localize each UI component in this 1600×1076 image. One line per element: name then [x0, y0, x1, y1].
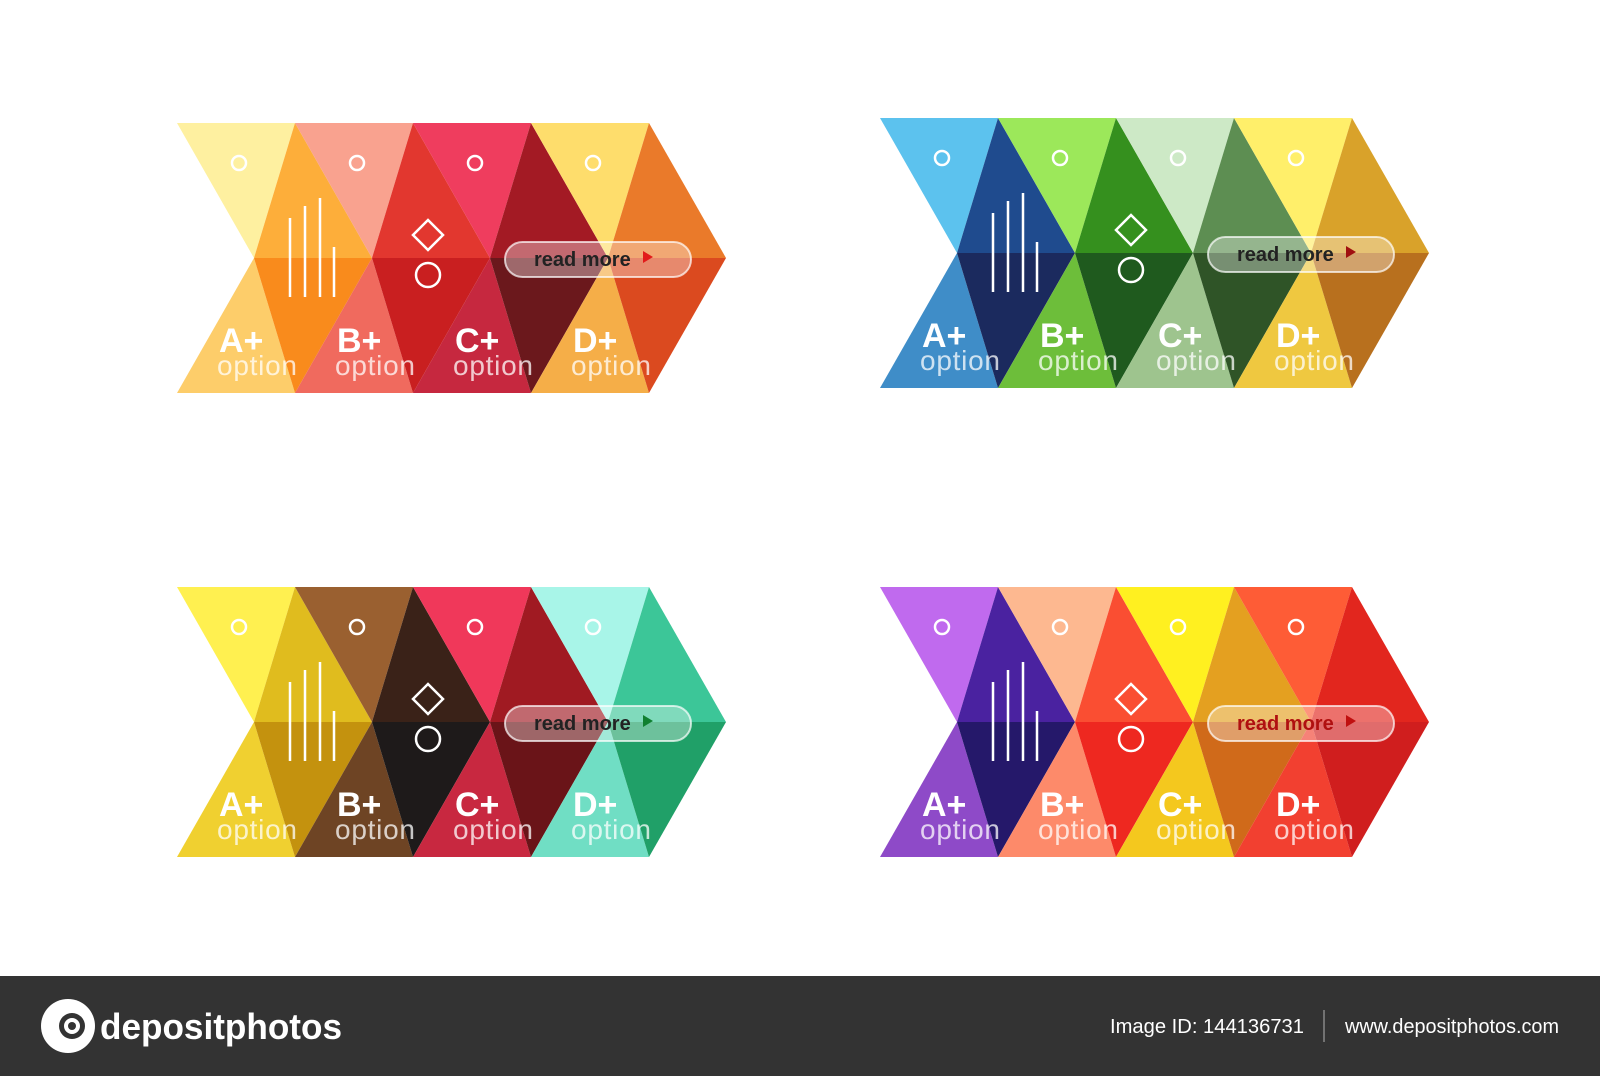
column C: [1116, 118, 1311, 388]
option labels: option: [453, 814, 533, 845]
panel: purple orange red chevron: [880, 587, 1429, 857]
logo text: depositphotos: [100, 1006, 342, 1047]
option labels: D+: [1276, 786, 1320, 824]
panel: blue green chevron: [880, 118, 1429, 388]
column C: [413, 123, 608, 393]
read more button: [505, 242, 691, 277]
column B: [295, 123, 490, 393]
read more button: [505, 706, 691, 741]
option labels: C+: [1158, 786, 1202, 824]
option labels: D+: [573, 322, 617, 360]
option labels: C+: [1158, 317, 1202, 355]
option labels: [920, 317, 1354, 376]
option labels: option: [1038, 345, 1118, 376]
read more button: read more: [534, 249, 631, 271]
column C: [413, 587, 608, 857]
option labels: option: [217, 350, 297, 381]
option labels: option: [920, 814, 1000, 845]
column A: [880, 118, 1075, 388]
option labels: B+: [1040, 317, 1084, 355]
column D: [1234, 587, 1429, 857]
option labels: A+: [219, 786, 263, 824]
read more button: [1208, 237, 1394, 272]
option labels: [920, 786, 1354, 845]
column B: [295, 587, 490, 857]
website: www.depositphotos.com: [1344, 1016, 1559, 1038]
option labels: option: [920, 345, 1000, 376]
icon: camera logo: [41, 999, 95, 1053]
column D: [1234, 118, 1429, 388]
column D: [531, 123, 726, 393]
icons and labels: [935, 620, 1303, 761]
option labels: [217, 786, 651, 845]
option labels: option: [335, 814, 415, 845]
icons and labels: [232, 156, 600, 297]
panel: orange red chevron: [177, 123, 726, 393]
option labels: option: [1274, 814, 1354, 845]
option labels: B+: [337, 786, 381, 824]
option labels: option: [571, 814, 651, 845]
option labels: option: [335, 350, 415, 381]
column C: [1116, 587, 1311, 857]
option labels: B+: [1040, 786, 1084, 824]
option labels: B+: [337, 322, 381, 360]
option labels: option: [453, 350, 533, 381]
option labels: option: [1156, 814, 1236, 845]
read more button: read more: [534, 713, 631, 735]
option labels: A+: [922, 317, 966, 355]
option labels: option: [1038, 814, 1118, 845]
option labels: option: [217, 814, 297, 845]
icons and labels: [935, 151, 1303, 292]
column B: [998, 118, 1193, 388]
column A: [880, 587, 1075, 857]
option labels: A+: [219, 322, 263, 360]
read more button: [1208, 706, 1394, 741]
image id: Image ID: 144136731: [1110, 1016, 1304, 1038]
panel: yellow brown teal chevron: [177, 587, 726, 857]
option labels: option: [1156, 345, 1236, 376]
option labels: D+: [573, 786, 617, 824]
read more button: read more: [1237, 244, 1334, 266]
option labels: A+: [922, 786, 966, 824]
icons and labels: [232, 620, 600, 761]
option labels: option: [571, 350, 651, 381]
footer bar: [0, 976, 1600, 1076]
column A: [177, 587, 372, 857]
column A: [177, 123, 372, 393]
option labels: C+: [455, 786, 499, 824]
option labels: D+: [1276, 317, 1320, 355]
column D: [531, 587, 726, 857]
option labels: [217, 322, 651, 381]
read more button: read more: [1237, 713, 1334, 735]
option labels: C+: [455, 322, 499, 360]
column B: [998, 587, 1193, 857]
option labels: option: [1274, 345, 1354, 376]
